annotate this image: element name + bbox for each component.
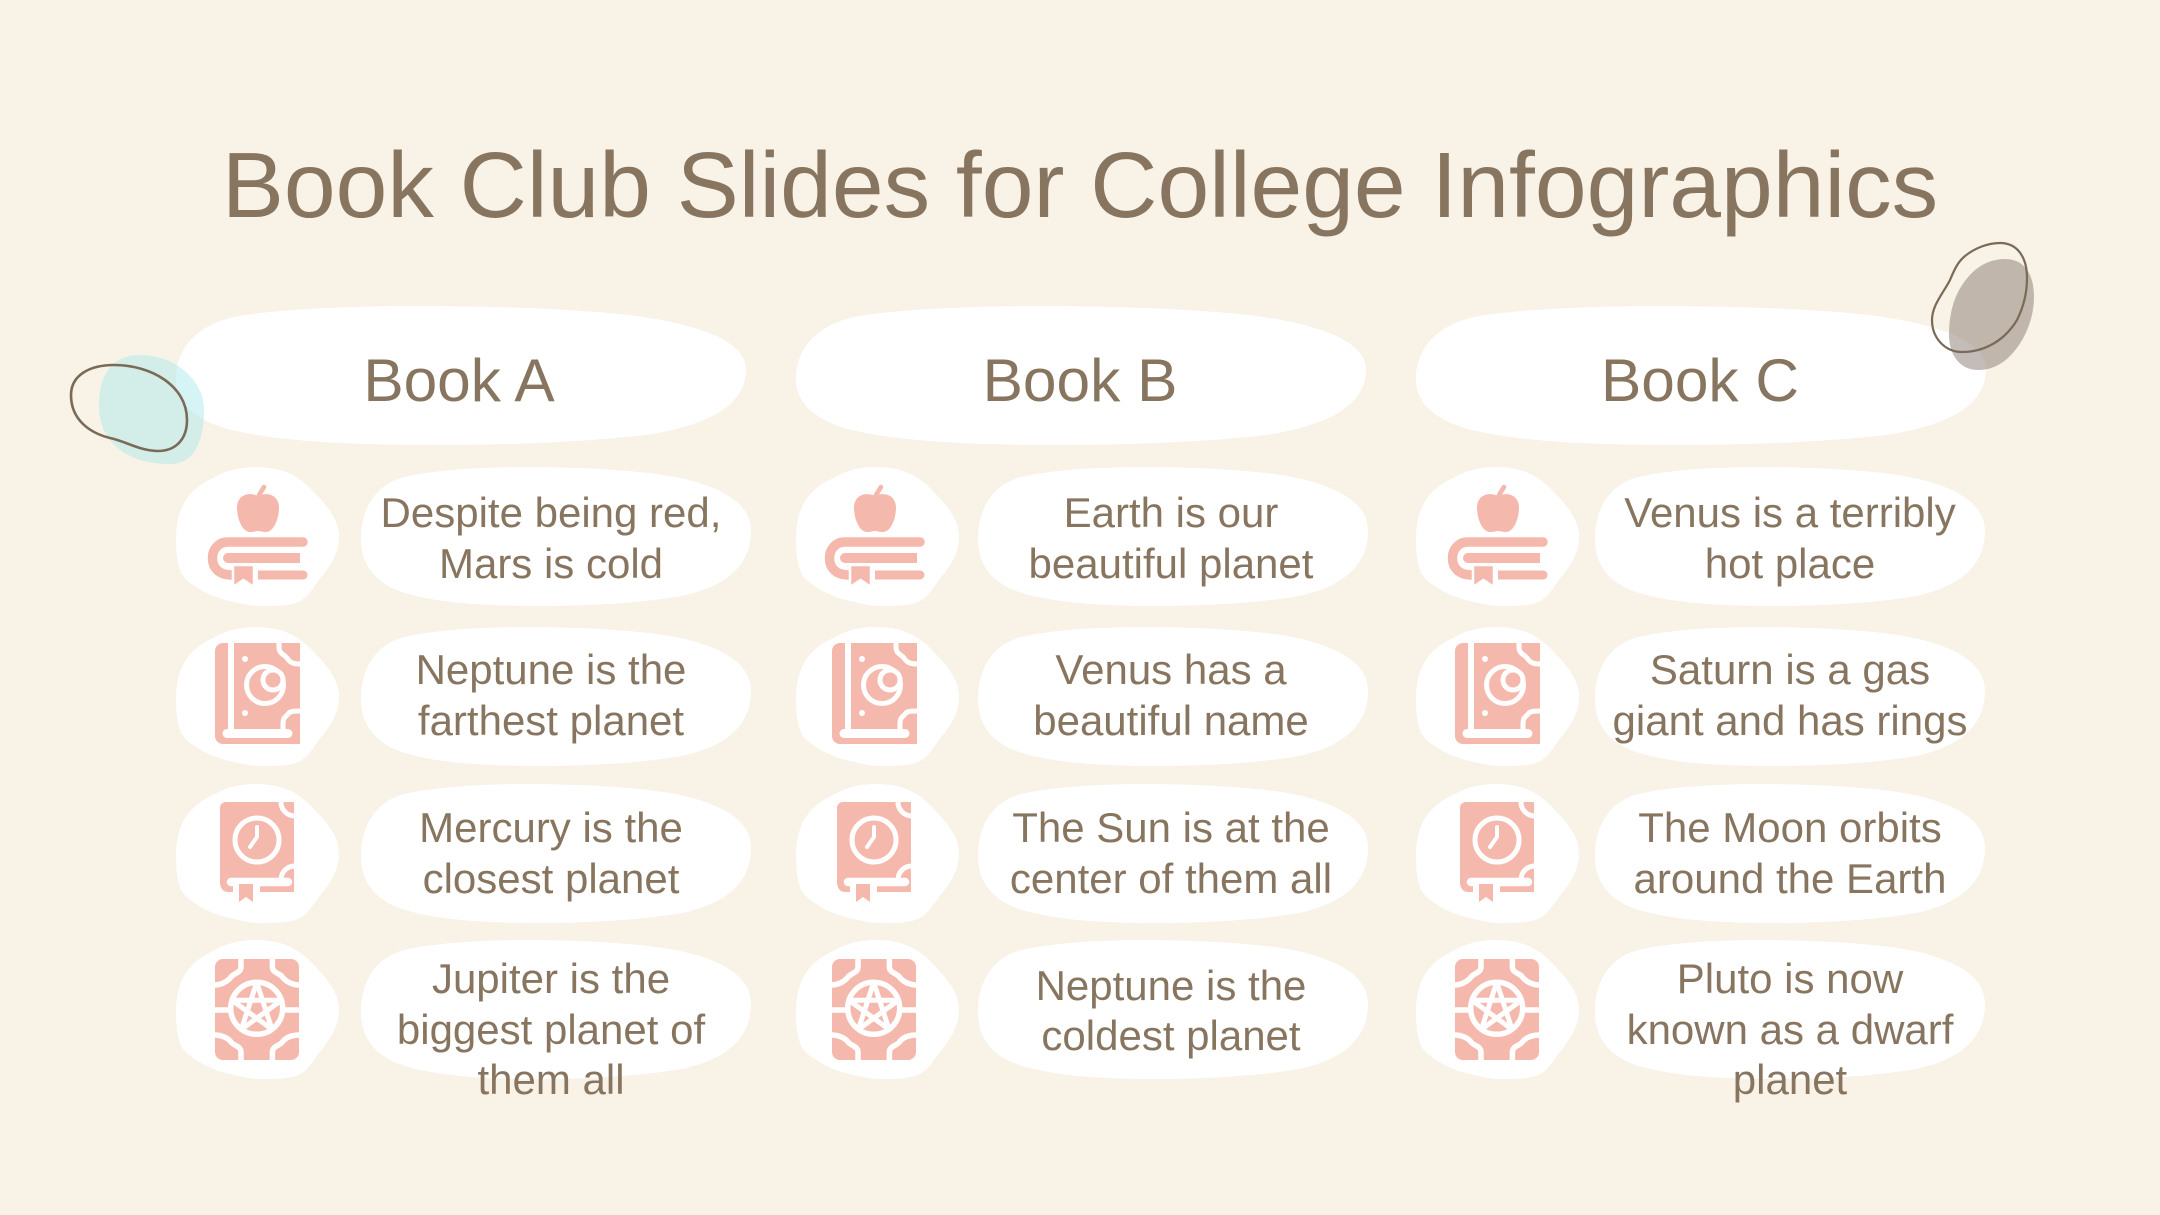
text: Sun: center of them all [1010,855,1332,902]
icon: pentagram book [176,940,339,1079]
icon: book stack with apple [796,467,959,606]
text: Venus hot: Venus is a terribly [1624,489,1956,536]
heading pill: Book C: Book C [1601,346,1799,414]
text: Moon [1595,784,1985,923]
heading pill: Book B: Book B [983,346,1177,414]
text: Earth: beautiful planet [1029,540,1314,587]
icon: clock book [796,784,959,923]
text: Neptune coldest: coldest planet [1041,1012,1301,1059]
icon: pentagram book [1416,940,1579,1079]
row: Book B item 1 [796,467,1368,606]
heading pill: Book A: Book A [363,346,555,414]
decoration: grey blob with outline, right [1932,243,2034,370]
column: Book A [176,306,751,1103]
text: Mercury: Mercury is the [419,804,683,851]
text: Saturn [1595,627,1985,766]
text: Venus: beautiful name [1033,697,1309,744]
text: Venus: Venus has a [1055,646,1287,693]
row: Book A item 3 [176,784,751,923]
text: Venus hot [1595,467,1985,606]
text: Pluto [1595,940,1985,1103]
row: Book A item 2 [176,627,751,766]
text: Saturn: Saturn is a gas [1650,646,1930,693]
text: Saturn: giant and has rings [1613,697,1967,744]
text: Pluto: Pluto is now [1677,955,1904,1002]
text: Neptune: Neptune is the [416,646,686,693]
row: Book B item 4 [796,940,1368,1079]
text: Jupiter: them all [477,1056,625,1103]
icon: moon book [1416,627,1579,766]
text: Neptune coldest: Neptune is the [1036,962,1306,1009]
text: Moon: The Moon orbits [1638,804,1942,851]
row: Book C item 3 [1416,784,1985,923]
decoration: teal blob with outline, left [71,355,204,464]
text: Mars [361,467,751,606]
text: Neptune coldest [978,940,1368,1079]
row: Book A item 4 [176,940,751,1103]
text: Venus [978,627,1368,766]
column: Book B [796,306,1368,1079]
icon: book stack with apple [1416,467,1579,606]
icon: clock book [176,784,339,923]
text: Venus hot: hot place [1705,540,1875,587]
text: Pluto: known as a dwarf [1627,1006,1954,1053]
text: Mars: Mars is cold [439,540,663,587]
icon: pentagram book [796,940,959,1079]
text: Jupiter [361,940,751,1103]
heading pill: Book C [1416,306,1986,445]
text: Pluto: planet [1733,1056,1848,1103]
row: Book C item 2 [1416,627,1985,766]
text: Mercury [361,784,751,923]
text: Moon: around the Earth [1634,855,1946,902]
text: Sun: The Sun is at the [1012,804,1330,851]
column: Book C [1416,306,1986,1103]
icon: book stack with apple [176,467,339,606]
text: Neptune: farthest planet [418,697,684,744]
row: Book C item 4 [1416,940,1985,1103]
title: Book Club Slides for College Infographics [222,133,1938,237]
icon: clock book [1416,784,1579,923]
heading pill: Book A [176,306,746,445]
icon: moon book [176,627,339,766]
text: Earth: Earth is our [1064,489,1278,536]
heading pill: Book B [796,306,1366,445]
row: Book A item 1 [176,467,751,606]
text: Jupiter: biggest planet of [397,1006,705,1053]
text: Earth [978,467,1368,606]
icon: moon book [796,627,959,766]
row: Book B item 2 [796,627,1368,766]
text: Neptune [361,627,751,766]
text: Mercury: closest planet [423,855,680,902]
row: Book C item 1 [1416,467,1985,606]
text: Sun [978,784,1368,923]
row: Book B item 3 [796,784,1368,923]
text: Jupiter: Jupiter is the [432,955,670,1002]
text: Mars: Despite being red, [381,489,721,536]
